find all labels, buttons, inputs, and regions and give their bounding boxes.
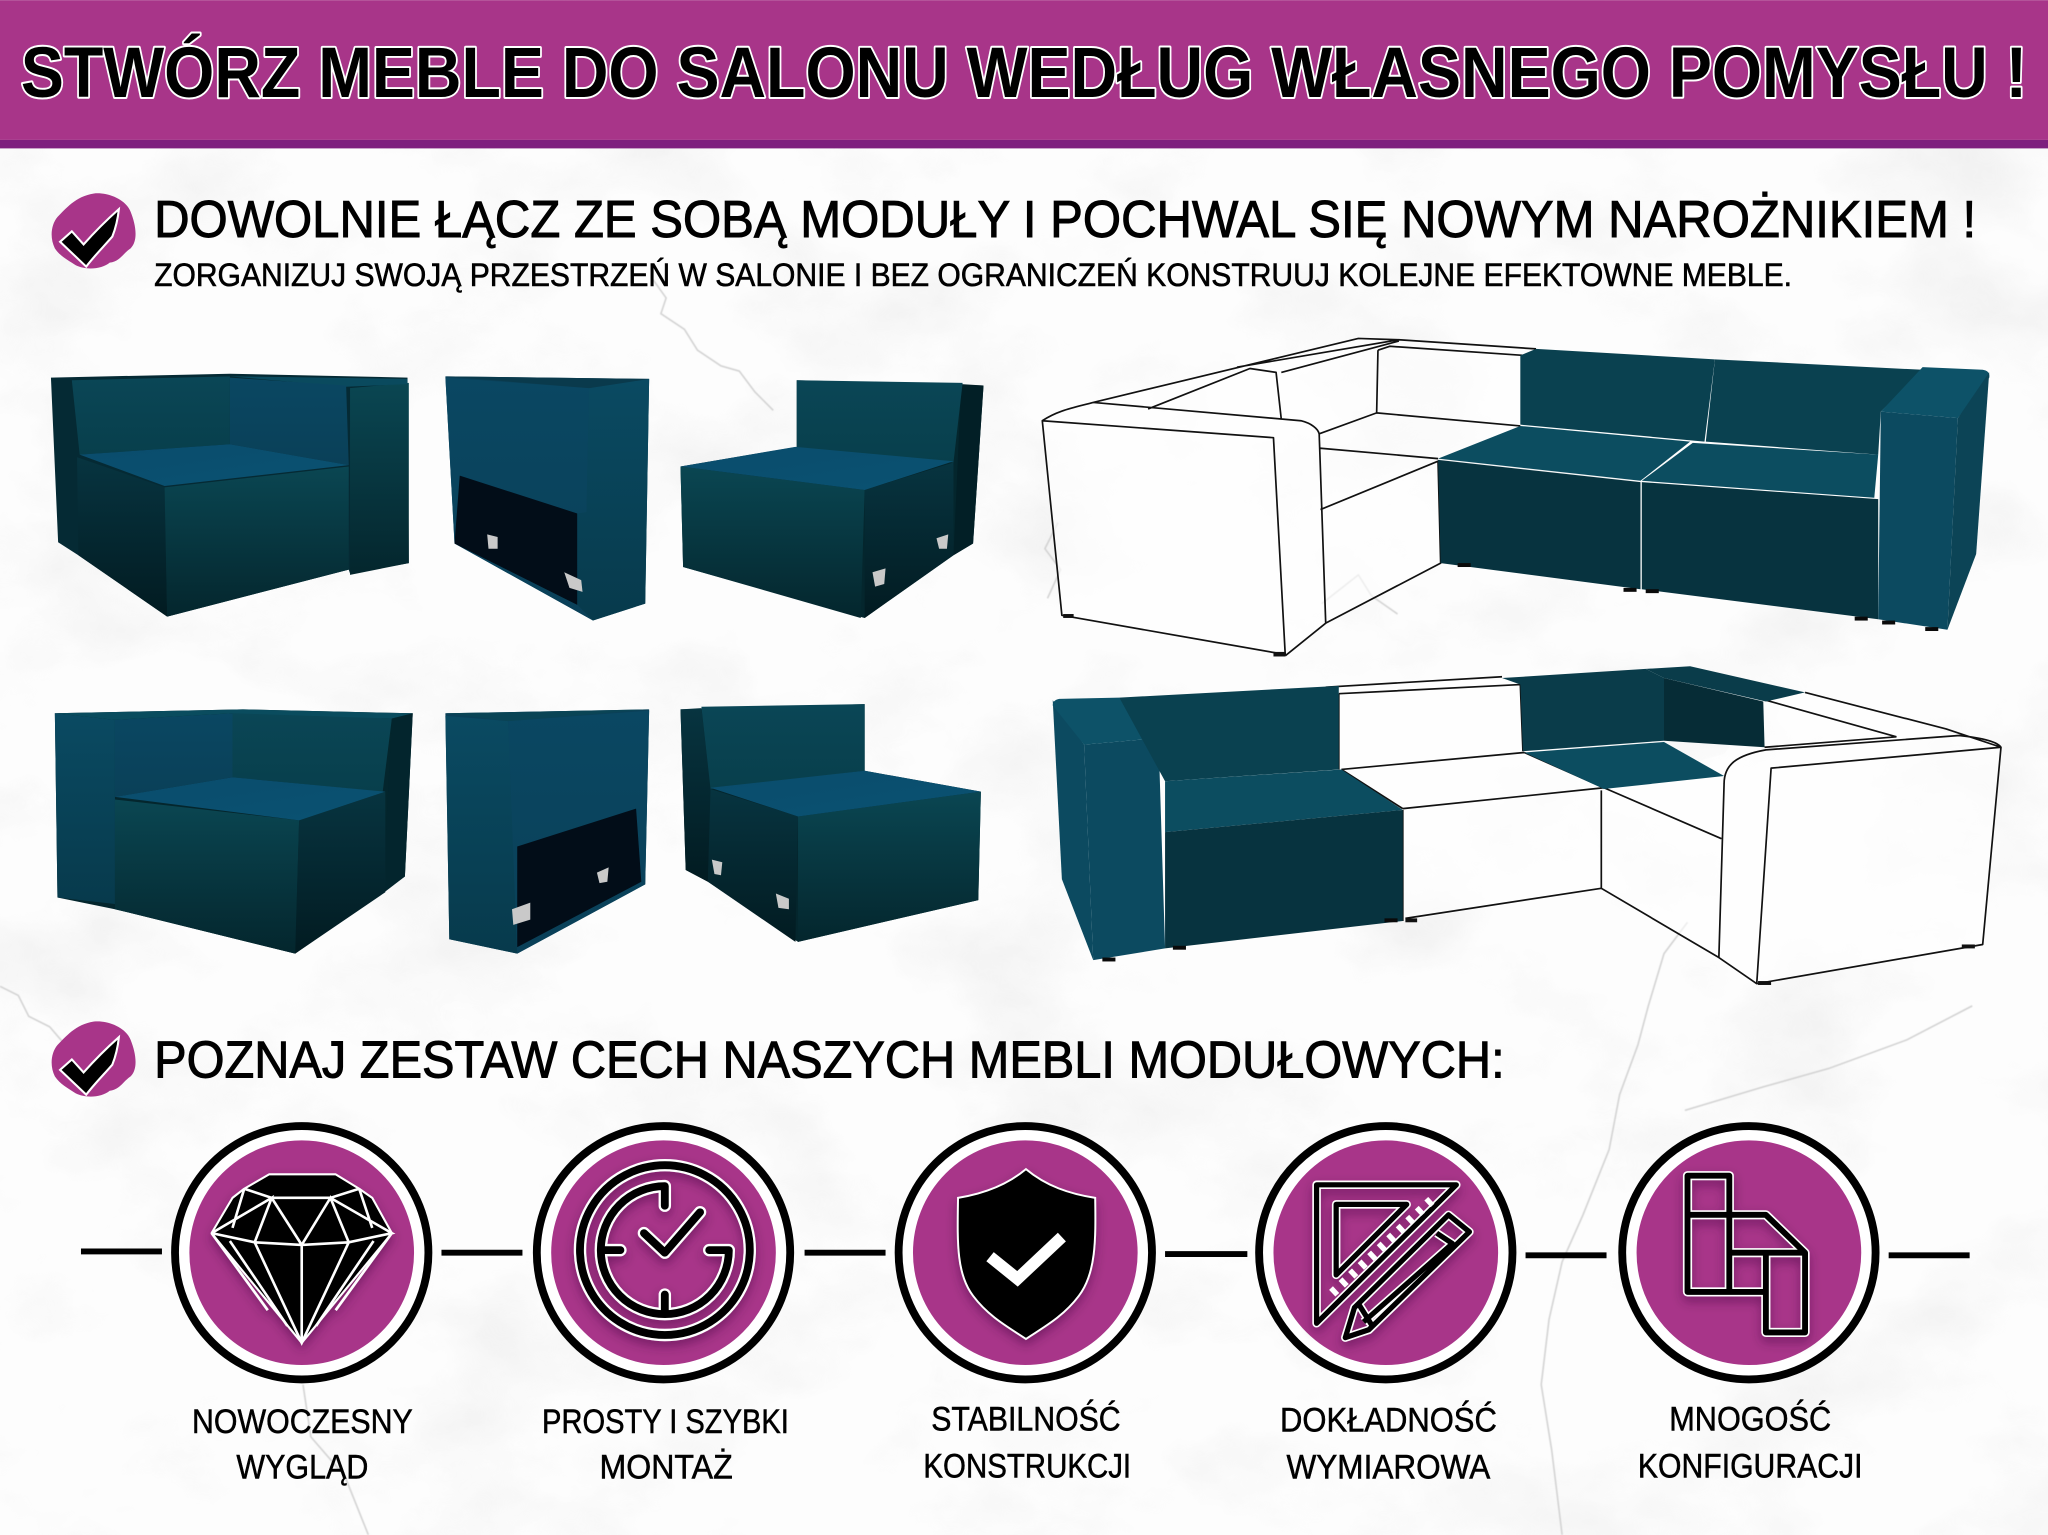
handles xyxy=(712,860,789,909)
feature: stabilność konstrukcji xyxy=(899,1126,1152,1485)
feature: mnogość konfiguracji xyxy=(1622,1126,1876,1485)
caption line 2: WYMIAROWA xyxy=(1287,1449,1491,1487)
caption line 2: WYGLĄD xyxy=(236,1449,368,1487)
feet xyxy=(1063,614,1285,656)
chair: corner module, front left xyxy=(51,374,409,617)
icon: ruler and pencil xyxy=(1317,1185,1469,1338)
ring outline xyxy=(1622,1126,1876,1379)
handles xyxy=(512,867,609,925)
sofa: bottom configuration xyxy=(1053,666,2001,985)
feature: nowoczesny wygląd xyxy=(175,1126,428,1487)
caption: NOWOCZESNY xyxy=(192,1403,413,1441)
caption: STABILNOŚĆ xyxy=(931,1399,1121,1438)
icon: clock xyxy=(580,1165,750,1335)
header band xyxy=(0,0,2048,148)
feet xyxy=(1102,918,1398,961)
teal modules xyxy=(1438,349,1989,631)
icon ring xyxy=(183,1134,421,1372)
ring outline xyxy=(537,1126,790,1379)
caption line 2: KONFIGURACJI xyxy=(1638,1447,1863,1485)
caption line 2: MONTAŻ xyxy=(600,1449,733,1487)
ring outline xyxy=(175,1126,428,1379)
caption: DOKŁADNOŚĆ xyxy=(1280,1401,1497,1440)
ring outline xyxy=(899,1126,1152,1379)
icon ring xyxy=(1630,1134,1868,1372)
teal modules xyxy=(1053,666,1805,961)
icon ring xyxy=(545,1134,782,1372)
feet xyxy=(1458,563,1938,631)
caption line 2: KONSTRUKCJI xyxy=(923,1447,1131,1485)
feet xyxy=(1405,918,1975,985)
white outlined modules xyxy=(1042,338,1536,656)
handles xyxy=(872,534,948,587)
handles xyxy=(487,534,583,592)
heading: features: POZNAJ ZESTAW CECH NASZYCH MEBLI MODUŁOWYCH: xyxy=(154,1031,1505,1089)
sofa: top configuration xyxy=(1042,338,1989,656)
chair: corner module, mirrored xyxy=(55,709,413,954)
chair: module back view with opening xyxy=(445,376,649,621)
heading: modules: DOWOLNIE ŁĄCZ ZE SOBĄ MODUŁY I POCHWAL SIĘ NOWYM NAROŻNIKIEM ! xyxy=(154,190,1976,248)
caption: PROSTY I SZYBKI xyxy=(542,1403,789,1441)
icon ring xyxy=(1267,1134,1505,1372)
icon: shield xyxy=(958,1169,1095,1339)
icon: check badge 1 xyxy=(52,193,136,269)
white outlined modules xyxy=(1326,677,2001,985)
chair: armless module left xyxy=(680,704,981,942)
feature: prosty i szybki montaż xyxy=(537,1126,790,1487)
icon: check badge 2 xyxy=(52,1021,136,1097)
connector lines xyxy=(81,1251,1970,1255)
caption: MNOGOŚĆ xyxy=(1669,1399,1831,1438)
icon: configuration blocks xyxy=(1688,1176,1805,1332)
subheading: ZORGANIZUJ SWOJĄ PRZESTRZEŃ W SALONIE I BEZ OGRANICZEŃ KONSTRUUJ KOLEJNE EFEKTOWNE MEBLE. xyxy=(154,257,1792,293)
icon: diamond xyxy=(212,1174,392,1343)
chair: mirrored module back view xyxy=(445,709,649,954)
feature: dokładność wymiarowa xyxy=(1259,1126,1512,1487)
chair: armless module right xyxy=(680,380,984,618)
ring outline xyxy=(1259,1126,1512,1379)
icon ring xyxy=(906,1134,1144,1372)
